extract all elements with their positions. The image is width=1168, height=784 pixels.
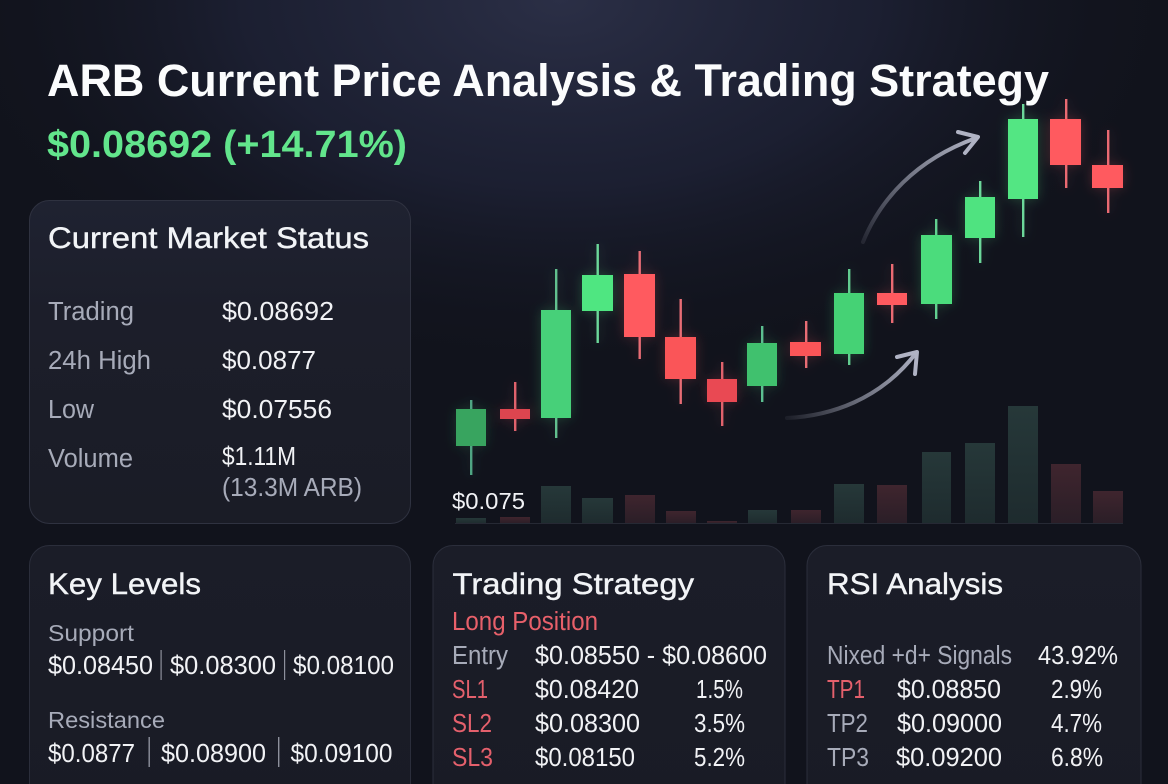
resistance levels xyxy=(48,707,392,768)
row: trading: Trading xyxy=(48,298,134,326)
row: take profit 2: TP2 xyxy=(827,710,868,738)
resistance levels: $0.0877 xyxy=(48,740,135,768)
row: entry: $0.08550 - $0.08600 xyxy=(535,642,767,670)
row: low: $0.07556 xyxy=(222,396,332,424)
candlestick and volume chart xyxy=(452,99,1123,524)
support levels xyxy=(48,620,394,680)
price axis label: $0.075 xyxy=(452,488,525,514)
row: 24h high: $0.0877 xyxy=(222,347,316,375)
heading: trading strategy: Trading Strategy xyxy=(452,568,694,601)
row: stop loss 3: $0.08150 xyxy=(535,744,635,772)
heading: current market status: Current Market Status xyxy=(48,222,369,255)
row: signals: Nixed +d+ Signals xyxy=(827,642,1012,670)
row: 24h high: 24h High xyxy=(48,347,151,375)
support levels: $0.08300 xyxy=(170,652,276,680)
panel: current market status xyxy=(30,200,410,524)
row: stop loss 1: 1.5% xyxy=(696,676,743,704)
row: take profit 2 xyxy=(827,710,1102,738)
arrow: lower trend xyxy=(787,352,917,418)
panel: RSI analysis xyxy=(807,546,1141,784)
row: stop loss 2: SL2 xyxy=(452,710,492,738)
row: stop loss 1: SL1 xyxy=(452,676,488,704)
row: trading xyxy=(48,298,334,326)
volume bars xyxy=(455,406,1123,524)
arrow: upper trend xyxy=(863,132,978,242)
position label: Long Position xyxy=(452,608,598,636)
support levels: $0.08100 xyxy=(293,652,394,680)
row: stop loss 3 xyxy=(452,744,745,772)
row: stop loss 2: 3.5% xyxy=(694,710,745,738)
support levels: Support xyxy=(48,620,134,646)
candlesticks xyxy=(456,99,1123,475)
row: stop loss 2 xyxy=(452,710,745,738)
row: low xyxy=(48,396,332,424)
row: take profit 1: 2.9% xyxy=(1051,676,1102,704)
current price and change: $0.08692 (+14.71%) xyxy=(47,124,407,166)
resistance levels: Resistance xyxy=(48,707,165,733)
row: take profit 2: 4.7% xyxy=(1051,710,1102,738)
resistance levels: $0.09100 xyxy=(290,740,392,768)
row: take profit 1 xyxy=(827,676,1102,704)
row: take profit 3: 6.8% xyxy=(1051,744,1103,772)
row: entry: Entry xyxy=(452,642,508,670)
row: volume xyxy=(48,443,362,502)
row: take profit 3 xyxy=(827,744,1103,772)
row: stop loss 1: $0.08420 xyxy=(535,676,639,704)
row: take profit 2: $0.09000 xyxy=(897,710,1002,738)
row: take profit 3: $0.09200 xyxy=(896,744,1002,772)
title: ARB Current Price Analysis & Trading Strategy xyxy=(47,55,1049,106)
row: signals: 43.92% xyxy=(1038,642,1118,670)
row: 24h high xyxy=(48,347,316,375)
row: trading: $0.08692 xyxy=(222,298,334,326)
panel: trading strategy xyxy=(433,546,785,784)
row: volume: (13.3M ARB) xyxy=(222,474,362,502)
row: stop loss 3: 5.2% xyxy=(694,744,745,772)
panel: key levels xyxy=(30,546,410,784)
row: stop loss 2: $0.08300 xyxy=(535,710,640,738)
row: stop loss 1 xyxy=(452,676,743,704)
heading: key levels: Key Levels xyxy=(48,568,201,601)
row: take profit 1: TP1 xyxy=(827,676,865,704)
row: take profit 3: TP3 xyxy=(827,744,869,772)
row: low: Low xyxy=(48,396,95,424)
row: stop loss 3: SL3 xyxy=(452,744,493,772)
support levels: $0.08450 xyxy=(48,652,153,680)
row: volume: Volume xyxy=(48,445,133,473)
heading: RSI analysis: RSI Analysis xyxy=(827,568,1003,601)
row: volume: $1.11M xyxy=(222,443,296,471)
resistance levels: $0.08900 xyxy=(161,740,266,768)
row: take profit 1: $0.08850 xyxy=(897,676,1001,704)
